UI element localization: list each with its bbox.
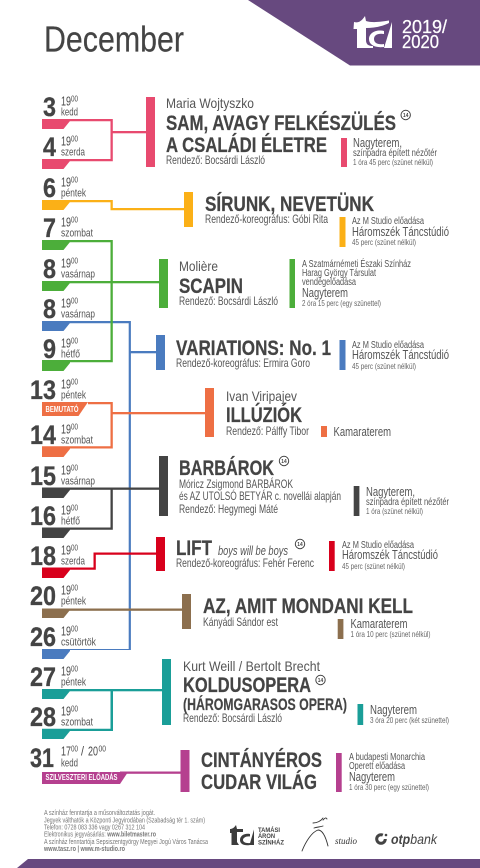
date: 6 péntek: 19 xyxy=(61,174,71,190)
date: 13 péntek: 13 xyxy=(30,375,56,405)
venue: Sam xyxy=(341,135,438,167)
date: 20 péntek: 20 xyxy=(30,581,56,611)
venue: Variations xyxy=(340,340,449,371)
date: 16 hétfő xyxy=(30,501,80,531)
date: 18 szerda: 00 xyxy=(71,544,78,552)
venue: Illúziók xyxy=(321,424,391,439)
date: 13 péntek: 19 xyxy=(61,376,71,392)
venue: Cintányéros: Nagyterem xyxy=(349,769,395,784)
venue: Az, amit: Kamaraterem xyxy=(350,616,408,631)
date: 16 hétfő: 00 xyxy=(71,504,78,512)
date: 31 kedd: 20 xyxy=(88,744,98,758)
date: 8 vasárnap second xyxy=(43,294,95,324)
connector: magenta, Cintányéros xyxy=(42,750,190,792)
date: 28 szombat: 00 xyxy=(71,704,78,714)
New Year's Eve label: SZILVESZTERI ELŐADÁS xyxy=(46,773,118,782)
event: Lift: Rendező-koreográfus: Fehér Ferenc xyxy=(176,556,314,570)
event: Scapin xyxy=(179,258,278,308)
logo: OTP Bank: otpbank xyxy=(391,831,438,847)
date: 8 vasárnap second: 8 xyxy=(43,294,56,324)
date: 18 szerda: 19 xyxy=(61,542,71,558)
event: Lift: boys will be boys xyxy=(218,543,288,558)
date: 16 hétfő: 16 xyxy=(30,501,56,531)
date: 14 szombat: 19 xyxy=(61,422,71,436)
connector: red, Lift xyxy=(42,537,165,578)
event: Sírunk, nevetünk: SÍRUNK, NEVETÜNK xyxy=(205,191,374,216)
date: 20 péntek: péntek xyxy=(61,596,86,608)
date: 26 csütörtök: 00 xyxy=(71,624,78,634)
event: Cintányéros cudar világ xyxy=(201,747,322,794)
venue: Az, amit xyxy=(338,616,431,639)
event: Sam, avagy felkészülés: Maria Wojtyszko xyxy=(166,95,254,111)
date: 27 péntek: 27 xyxy=(30,662,56,692)
event: Scapin: Molière xyxy=(179,258,218,274)
premiere label: BEMUTATÓ xyxy=(46,405,78,414)
event: Variations xyxy=(176,336,331,370)
venue: Barbárok: Nagyterem, xyxy=(366,484,415,499)
date: 6 péntek xyxy=(43,173,86,203)
venue: Sam: színpadra épített nézőtér xyxy=(353,148,438,159)
date: 27 péntek xyxy=(30,662,86,692)
date: 15 vasárnap: 15 xyxy=(30,461,56,491)
event: Lift xyxy=(176,536,314,570)
event: Koldusopera: KOLDUSOPERA xyxy=(183,673,311,697)
connector: green, Scapin xyxy=(42,240,168,371)
event: Barbárok: Rendező: Hegymegi Máté xyxy=(179,502,278,516)
date: 26 csütörtök: 26 xyxy=(30,622,56,652)
event: Illúziók xyxy=(226,388,309,438)
event: Koldusopera: (HÁROMGARASOS OPERA) xyxy=(183,695,347,714)
date: 9 hétfő: 19 xyxy=(61,336,71,350)
date: 8 vasárnap second: 00 xyxy=(71,296,78,306)
date: 9 hétfő xyxy=(43,334,80,364)
event: Cintányéros cudar világ: CINTÁNYÉROS xyxy=(201,747,322,772)
date: 27 péntek: 19 xyxy=(61,664,71,678)
event: Sam, avagy felkészülés: A CSALÁDI ÉLETRE xyxy=(166,132,327,157)
venue: Koldusopera: 3 óra 20 perc (két szünettel) xyxy=(370,715,449,725)
date: 15 vasárnap: vasárnap xyxy=(61,476,95,488)
date: 6 péntek: péntek xyxy=(61,188,86,200)
date: 31 kedd: / xyxy=(81,744,84,758)
date: 8 vasárnap second: vasárnap xyxy=(61,308,95,320)
venue: Barbárok xyxy=(354,484,450,516)
date: 3 kedd: kedd xyxy=(61,106,78,118)
logo: Tamási Áron Színház: ÁRON xyxy=(258,833,275,840)
venue: Sam: 1 óra 45 perc (szünet nélkül) xyxy=(353,157,433,167)
date: 13 péntek xyxy=(30,375,86,405)
footer text: Telefon: 0728 083 336 vagy 0267 312 104 xyxy=(44,824,145,832)
date: 18 szerda xyxy=(30,541,86,571)
date: 14 szombat: szombat xyxy=(61,434,93,446)
event: Variations: Rendező-koreográfus: Ermira Goro xyxy=(176,356,310,370)
venue: Scapin: 2 óra 15 perc (egy szünettel) xyxy=(302,298,381,308)
venue: Lift: Az M Studio előadása xyxy=(342,540,414,551)
date: 14 szombat: 00 xyxy=(71,422,78,432)
footer text: www.tasz.ro | www.m-studio.ro xyxy=(43,846,125,853)
event: Cintányéros cudar világ: CUDAR VILÁG xyxy=(201,769,317,794)
date: 9 hétfő: 9 xyxy=(43,334,56,364)
date: 6 péntek: 00 xyxy=(71,176,78,184)
venue: Sírunk xyxy=(340,216,449,247)
venue: Koldusopera: Nagyterem xyxy=(370,702,417,717)
event: Barbárok: BARBÁROK xyxy=(179,455,274,480)
date: 13 péntek: 00 xyxy=(71,378,78,386)
event: Lift: LIFT xyxy=(176,536,212,560)
logo: M Studio: studio xyxy=(335,836,357,846)
age badge 14 xyxy=(401,110,410,120)
date: 8 vasárnap: 8 xyxy=(43,254,56,284)
venue: Koldusopera xyxy=(358,702,449,725)
age badge 14: 14 xyxy=(281,459,288,465)
date: 7 szombat: szombat xyxy=(61,228,93,240)
event: Az, amit mondani kell xyxy=(203,594,413,629)
event: Variations: VARIATIONS: No. 1 xyxy=(176,336,331,360)
venue: Scapin: Nagyterem xyxy=(302,285,348,300)
connector: blue, Variations xyxy=(42,321,165,659)
footer text: A színház fenntartója Sepsiszentgyörgy Megyei Jogú Város Tanácsa xyxy=(44,839,208,846)
date: 4 szerda: 00 xyxy=(71,134,78,144)
connector: dark, Barbárok xyxy=(42,456,168,538)
event: Koldusopera xyxy=(183,658,347,725)
date: 16 hétfő: 19 xyxy=(61,502,71,518)
season years: 2020 xyxy=(402,32,439,52)
date: 7 szombat: 19 xyxy=(61,214,71,230)
age badge 14: 14 xyxy=(297,542,304,548)
venue: Variations: 45 perc (szünet nélkül) xyxy=(352,361,416,371)
event: Illúziók: Ivan Viripajev xyxy=(226,388,297,404)
event: Koldusopera: Kurt Weill / Bertolt Brecht xyxy=(183,658,320,674)
venue: Sírunk: Az M Studio előadása xyxy=(352,216,424,227)
event: Illúziók: Rendező: Pálffy Tibor xyxy=(226,424,309,438)
venue: Scapin xyxy=(290,257,411,308)
date: 28 szombat: 28 xyxy=(30,702,56,732)
date: 31 kedd: kedd xyxy=(61,758,78,770)
date: 4 szerda xyxy=(43,132,86,162)
age badge 14: 14 xyxy=(403,113,409,119)
connector: teal, Koldusopera xyxy=(42,659,171,739)
event: Barbárok xyxy=(179,455,341,516)
venue: Cintányéros xyxy=(336,752,429,792)
event: Barbárok: és AZ UTOLSÓ BETYÁR c. novellái alapján xyxy=(179,488,341,503)
venue: Lift: 45 perc (szünet nélkül) xyxy=(342,561,405,571)
date: 31 kedd: 00 xyxy=(98,744,106,754)
logo: Tamási Áron Színház xyxy=(230,825,284,846)
venue: Sírunk: 45 perc (szünet nélkül) xyxy=(352,237,416,247)
venue: Variations: Az M Studio előadása xyxy=(352,340,424,351)
date: 26 csütörtök: csütörtök xyxy=(61,636,96,648)
date: 3 kedd xyxy=(43,92,78,122)
age badge 14 xyxy=(279,456,289,466)
date: 8 vasárnap: vasárnap xyxy=(61,268,95,280)
date: 31 kedd: 31 xyxy=(30,743,54,773)
season years xyxy=(402,17,447,52)
footer text: Jegyek válthatók a Központi Jegyirodában (Szabadság tér 1. szám) xyxy=(44,817,205,824)
date: 31 kedd: 17 xyxy=(61,744,71,758)
date: 4 szerda: 19 xyxy=(61,134,71,148)
date: 26 csütörtök xyxy=(30,622,96,652)
date: 7 szombat: 7 xyxy=(43,213,56,243)
date: 7 szombat: 00 xyxy=(71,216,78,224)
date: 18 szerda: 18 xyxy=(30,541,56,571)
title: December xyxy=(44,18,184,60)
event: Scapin: Rendező: Bocsárdi László xyxy=(179,294,278,308)
logo: Tamási Áron Színház: SZÍNHÁZ xyxy=(258,838,284,846)
venue: Scapin: A Szatmárnémeti Északi Színház xyxy=(302,257,411,270)
connector: pink, Sam xyxy=(42,97,155,169)
date: 16 hétfő: hétfő xyxy=(61,516,80,528)
event: Az, amit mondani kell: AZ, AMIT MONDANI KELL xyxy=(203,594,413,618)
event: Illúziók: ILLÚZIÓK xyxy=(226,402,302,427)
date: 27 péntek: péntek xyxy=(61,676,86,688)
date: 20 péntek: 19 xyxy=(61,582,71,598)
date: 31 kedd xyxy=(30,743,106,773)
date: 28 szombat: szombat xyxy=(61,716,93,728)
event: Sírunk, nevetünk: Rendező-koreográfus: Góbi Rita xyxy=(205,212,328,226)
icon: theatre logo xyxy=(354,16,392,48)
event: Sam, avagy felkészülés: SAM, AVAGY FELKÉSZÜLÉS xyxy=(166,110,396,135)
date: 6 péntek: 6 xyxy=(43,173,56,203)
date: 20 péntek: 00 xyxy=(71,584,78,592)
venue: Cintányéros: Operett előadása xyxy=(349,761,405,772)
date: 7 szombat xyxy=(43,213,93,243)
event: Barbárok: Móricz Zsigmond BARBÁROK xyxy=(179,476,293,491)
venue: Sam: Nagyterem, xyxy=(353,135,402,150)
date: 3 kedd: 3 xyxy=(43,92,56,122)
venue: Cintányéros: A budapesti Monarchia xyxy=(349,752,425,763)
venue: Lift: Háromszék Táncstúdió xyxy=(342,547,438,562)
connector: orange, Illúziók xyxy=(42,388,214,457)
date: 15 vasárnap xyxy=(30,461,95,491)
date: 28 szombat: 19 xyxy=(61,704,71,718)
date: 15 vasárnap: 00 xyxy=(71,464,78,472)
venue: Cintányéros: 1 óra 30 perc (egy szünettel) xyxy=(349,782,429,792)
footer text: A színház fenntartja a műsorváltoztatás jogát. xyxy=(44,810,155,817)
date: 31 kedd: 00 xyxy=(71,744,78,754)
date: 4 szerda: 4 xyxy=(43,132,56,162)
event: Koldusopera: Rendező: Bocsárdi László xyxy=(183,711,282,725)
date: 8 vasárnap: 00 xyxy=(71,256,78,266)
venue: Lift xyxy=(329,540,438,571)
date: 14 szombat xyxy=(30,420,93,450)
date: 28 szombat xyxy=(30,702,93,732)
date: 20 péntek xyxy=(30,581,86,611)
date: 8 vasárnap second: 19 xyxy=(61,296,71,310)
footer band xyxy=(17,859,480,868)
date: 27 péntek: 00 xyxy=(71,664,78,674)
date: 14 szombat: 14 xyxy=(30,420,56,450)
age badge 14 xyxy=(316,675,325,685)
date: 9 hétfő: hétfő xyxy=(61,348,80,360)
event: Sam, avagy felkészülés xyxy=(166,95,410,167)
date: 18 szerda: szerda xyxy=(61,556,86,568)
date: 8 vasárnap: 19 xyxy=(61,256,71,270)
footer text: Elektronikus jegyvásárlás: www.biletmaster.ro xyxy=(44,832,156,839)
date: 15 vasárnap: 19 xyxy=(61,462,71,478)
event: Scapin: SCAPIN xyxy=(179,274,243,298)
age badge 14: 14 xyxy=(318,678,324,684)
date: 3 kedd: 00 xyxy=(71,94,78,104)
venue: Barbárok: 1 óra (szünet nélkül) xyxy=(366,506,423,516)
date: 3 kedd: 19 xyxy=(61,94,71,108)
footer text xyxy=(43,810,208,853)
date: 4 szerda: szerda xyxy=(61,146,86,158)
connector: yellow, Sírunk xyxy=(42,192,193,227)
venue: Barbárok: színpadra épített nézőtér xyxy=(366,497,450,508)
header banner xyxy=(248,0,480,66)
date: 9 hétfő: 00 xyxy=(71,336,78,346)
venue: Scapin: Harag György Társulat xyxy=(302,268,376,279)
venue: Az, amit: 1 óra 10 perc (szünet nélkül) xyxy=(350,629,431,639)
logo: Tamási Áron Színház: TAMÁSI xyxy=(258,827,280,834)
event: Sam, avagy felkészülés: Rendező: Bocsárdi László xyxy=(166,153,265,167)
season years: 2019/ xyxy=(402,17,447,37)
venue: Illúziók: Kamaraterem xyxy=(334,424,391,439)
date: 8 vasárnap xyxy=(43,254,95,284)
logo: M Studio xyxy=(302,818,357,851)
date: 13 péntek: péntek xyxy=(61,390,86,402)
venue: Scapin: vendégelőadása xyxy=(302,277,356,288)
event: Sírunk, nevetünk xyxy=(205,191,374,226)
date: 26 csütörtök: 19 xyxy=(61,624,71,638)
event: Az, amit mondani kell: Kányádi Sándor est xyxy=(203,615,278,629)
connector: brown, Az, amit mondani kell xyxy=(42,594,191,629)
